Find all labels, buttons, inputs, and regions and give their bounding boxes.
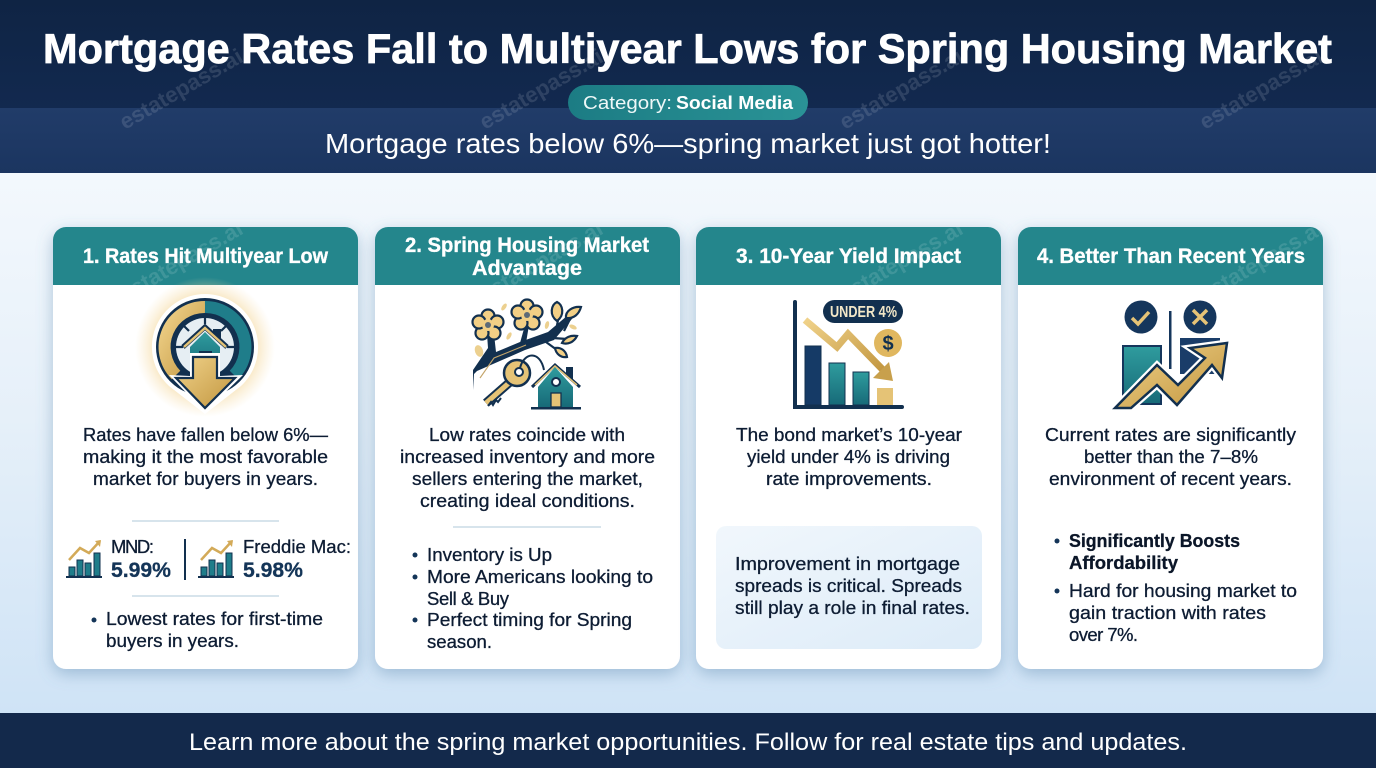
card 4 bullets: Hard for housing market to xyxy=(1069,580,1297,601)
card 1 heading xyxy=(53,227,358,285)
card 4 heading: 4. Better Than Recent Years xyxy=(1037,244,1305,268)
card 1 text: market for buyers in years. xyxy=(93,468,318,489)
card 2 heading: Advantage xyxy=(472,256,582,280)
card 2 heading xyxy=(375,227,680,285)
card 1 bullet: Lowest rates for first-time xyxy=(106,608,323,629)
footer band xyxy=(0,713,1376,768)
callout: mortgage spreads: Improvement in mortgage xyxy=(735,553,960,574)
icon: house in gauge with down arrow xyxy=(135,277,275,417)
footer band: Learn more about the spring market opportunities. Follow for real estate tips and updates. xyxy=(189,729,1187,756)
card 4 bullets: Affordability xyxy=(1069,552,1179,573)
stat: MND: MND: xyxy=(111,536,154,557)
card 4 heading: estatepass.ai xyxy=(1195,216,1327,306)
icon: mini bar chart xyxy=(198,540,234,578)
title: Mortgage Rates Fall to Multiyear Lows for Spring Housing Market xyxy=(43,25,1332,72)
card 2 heading: 2. Spring Housing Market xyxy=(405,233,649,257)
icon: dollar coin: $ xyxy=(882,333,894,355)
card 2 bullets: season. xyxy=(427,631,492,652)
card 2 text: sellers entering the market, xyxy=(412,468,643,489)
header band: estatepass.ai xyxy=(115,44,247,134)
card 4 heading xyxy=(1018,227,1323,285)
card 2 bullets: Sell & Buy xyxy=(427,588,510,609)
stat: Freddie Mac: 5.98% xyxy=(243,558,303,582)
stat: Freddie Mac xyxy=(198,536,351,582)
card 2 bullets: Perfect timing for Spring xyxy=(427,609,632,630)
card 4 bullets: over 7%. xyxy=(1069,624,1138,645)
card 2 text xyxy=(400,424,655,511)
panel: 3. 10-Year Yield Impact xyxy=(696,216,1001,669)
card 2 bullets: Inventory is Up xyxy=(427,544,552,565)
callout: mortgage spreads: spreads is critical. Spreads xyxy=(735,575,962,596)
stat: MND: 5.99% xyxy=(111,558,171,582)
header band xyxy=(0,0,1376,173)
badge: under 4%: UNDER 4% xyxy=(830,304,897,321)
card 4 text xyxy=(1045,424,1297,489)
category pill: Social Media xyxy=(676,92,794,113)
panel: 1. Rates Hit Multiyear Low xyxy=(53,216,358,669)
card 4 bullets: gain traction with rates xyxy=(1069,602,1266,623)
header band: estatepass.ai xyxy=(1195,44,1327,134)
card 4 bullets: Significantly Boosts xyxy=(1069,530,1240,551)
subtitle: Mortgage rates below 6%—spring market just got hotter! xyxy=(325,128,1051,159)
card 2 bullets xyxy=(412,544,653,652)
stat: MND xyxy=(66,536,171,582)
card 1 heading: estatepass.ai xyxy=(115,216,247,306)
card 3 text: rate improvements. xyxy=(766,468,932,489)
card 2 heading: estatepass.ai xyxy=(475,216,607,306)
icon: falling yield bar chart xyxy=(795,300,903,407)
page background xyxy=(0,173,1376,713)
icon: comparison with rising arrow xyxy=(1115,300,1227,408)
card 1 heading: 1. Rates Hit Multiyear Low xyxy=(83,244,328,268)
card 2 bullets: More Americans looking to xyxy=(427,566,653,587)
callout: mortgage spreads xyxy=(716,526,982,649)
icon: blossom branch, key and house xyxy=(472,300,581,410)
card 1 text: making it the most favorable xyxy=(83,446,328,467)
card 1 bullet: buyers in years. xyxy=(106,630,239,651)
card 1 bullet xyxy=(92,608,323,651)
panel: 4. Better Than Recent Years xyxy=(1018,216,1327,669)
card 3 text: The bond market’s 10-year xyxy=(736,424,962,445)
card 4 text: environment of recent years. xyxy=(1049,468,1292,489)
card 1 text xyxy=(83,424,328,489)
card 3 text: yield under 4% is driving xyxy=(747,446,950,467)
card 3 text xyxy=(736,424,962,489)
header band: estatepass.ai xyxy=(835,44,967,134)
card 3 heading: 3. 10-Year Yield Impact xyxy=(736,244,961,268)
category pill: Category: xyxy=(583,92,672,113)
card 3 heading xyxy=(696,227,1001,285)
card 2 text: Low rates coincide with xyxy=(429,424,625,445)
card 1 text: Rates have fallen below 6%— xyxy=(83,424,328,445)
header band: estatepass.ai xyxy=(475,44,607,134)
panel: 2. Spring Housing Market Advantage xyxy=(375,216,680,669)
callout: mortgage spreads: still play a role in final rates. xyxy=(735,597,970,618)
stat: Freddie Mac: Freddie Mac: xyxy=(243,536,351,557)
card 2 text: creating ideal conditions. xyxy=(420,490,635,511)
card 3 heading: estatepass.ai xyxy=(835,216,967,306)
card 4 bullets xyxy=(1054,530,1297,645)
card 2 text: increased inventory and more xyxy=(400,446,655,467)
card 4 text: Current rates are significantly xyxy=(1045,424,1297,445)
card 4 text: better than the 7–8% xyxy=(1084,446,1258,467)
icon: mini bar chart xyxy=(66,540,102,578)
category pill xyxy=(568,85,808,120)
